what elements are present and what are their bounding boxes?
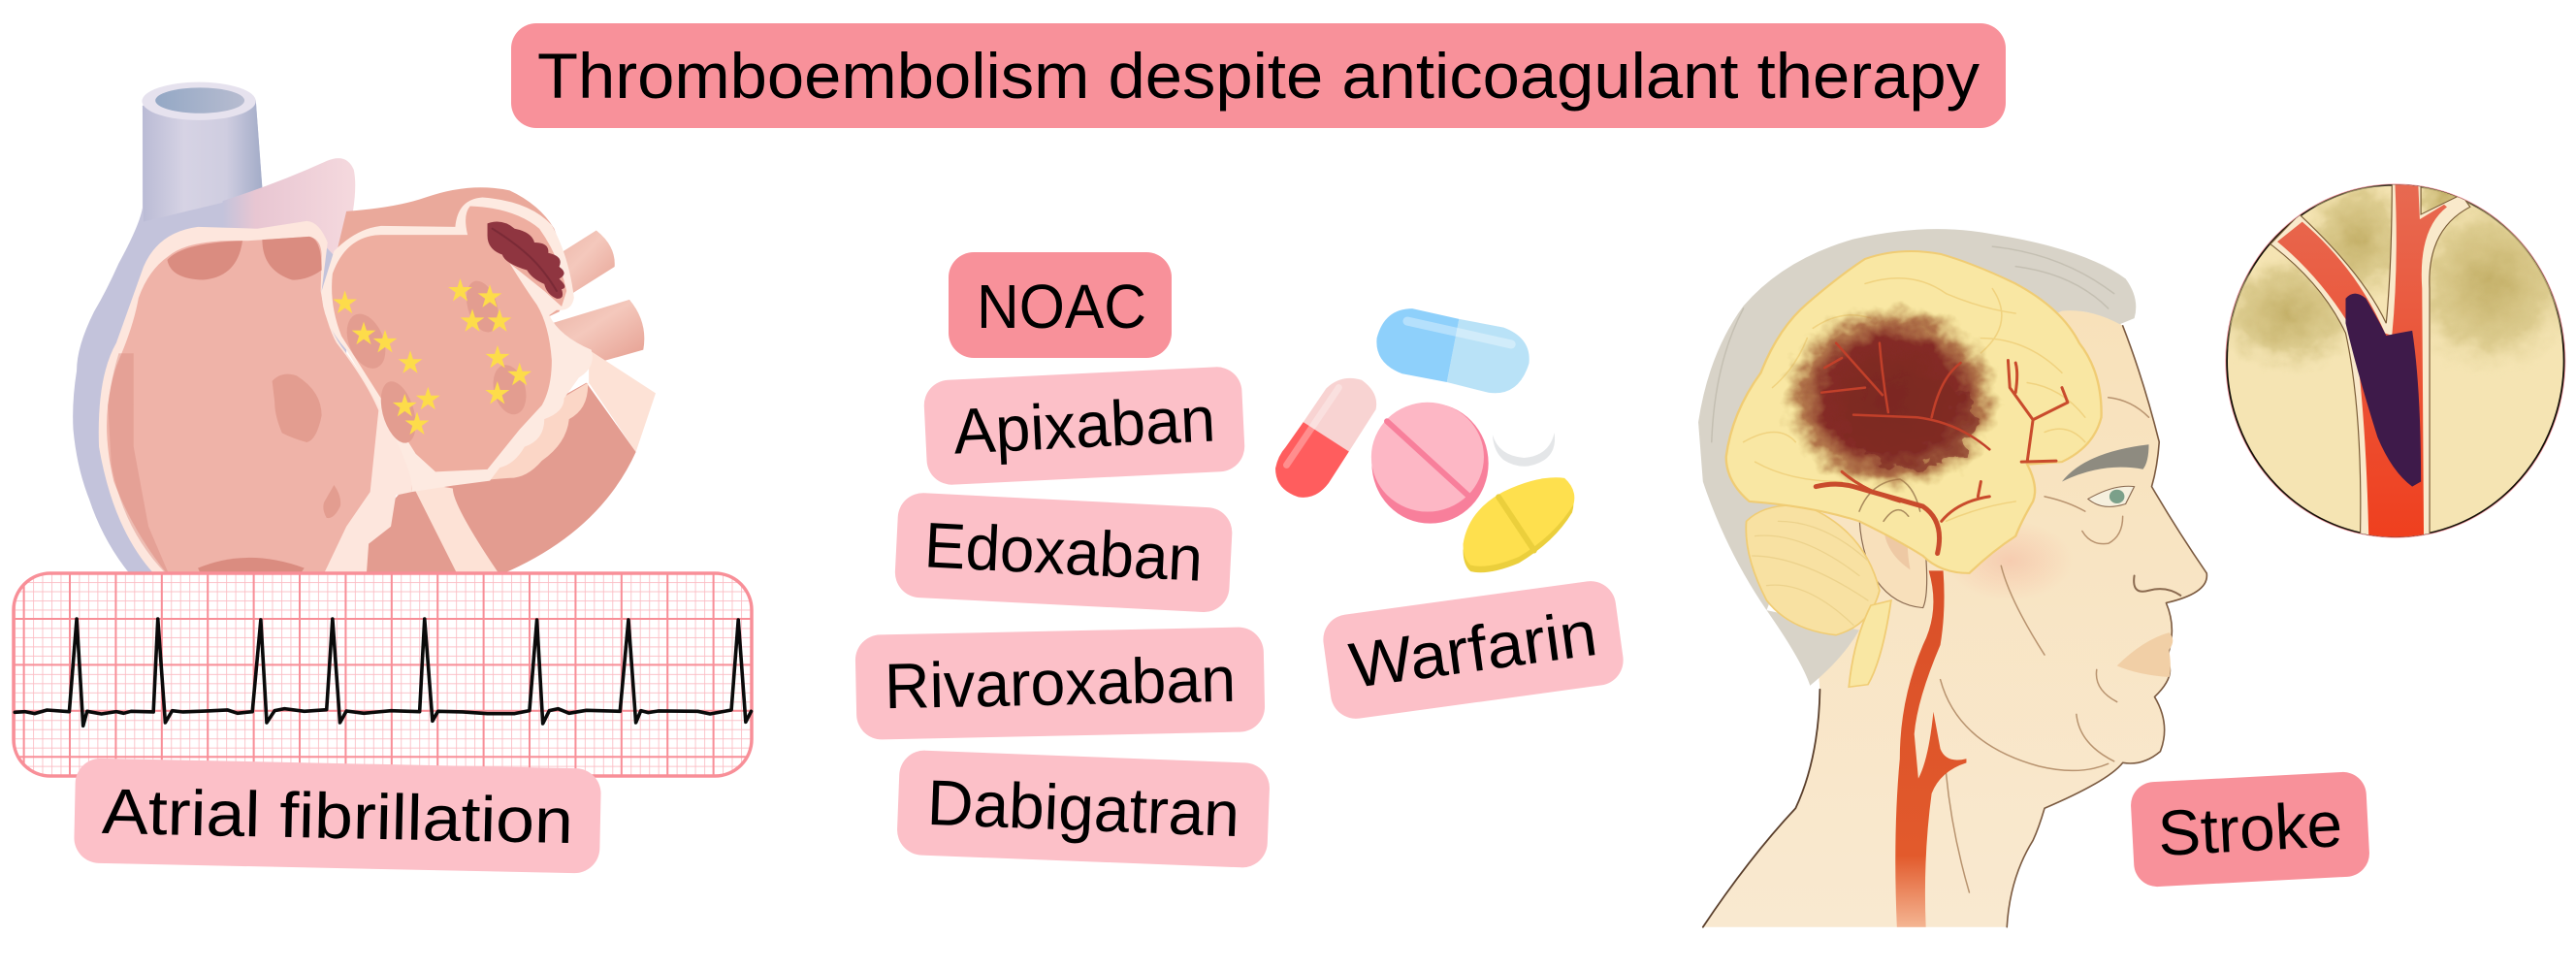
drug: Rivaroxaban: Rivaroxaban xyxy=(884,643,1237,722)
atrium wall xyxy=(322,198,593,492)
white tablet xyxy=(1493,433,1555,467)
infarct region xyxy=(1781,304,2001,492)
ventricle wall xyxy=(99,221,411,578)
title: Thromboembolism despite anticoagulant therapy xyxy=(537,40,1980,112)
heart illustration xyxy=(73,82,656,578)
cheek blush xyxy=(1947,521,2074,600)
face profile outline xyxy=(2007,326,2206,927)
brain xyxy=(1726,251,2102,573)
blue capsule xyxy=(1376,308,1530,393)
facial wrinkles xyxy=(1941,398,2149,892)
ear xyxy=(1859,479,1927,608)
neck back outline xyxy=(1703,690,1819,927)
eye xyxy=(2088,486,2135,506)
drug: Rivaroxaban xyxy=(854,627,1266,740)
papillary muscle shadows xyxy=(108,237,340,578)
inset: clot in vessel xyxy=(2225,183,2566,538)
drug: Warfarin xyxy=(1320,578,1626,722)
ECG trace xyxy=(15,619,751,726)
brain stem xyxy=(1849,600,1891,687)
scalloped fat under atrium xyxy=(488,383,588,480)
nose shadow xyxy=(2134,575,2180,596)
hair xyxy=(1698,229,2136,686)
brain folds xyxy=(1744,278,2085,521)
drug: Edoxaban: Edoxaban xyxy=(922,508,1205,595)
cerebral arteries xyxy=(1816,343,2068,554)
septum band xyxy=(415,487,498,572)
pink tablet xyxy=(1371,403,1489,524)
drug: Edoxaban xyxy=(894,492,1234,613)
label: Atrial fibrillation xyxy=(74,758,601,874)
ECG strip xyxy=(14,573,752,776)
pills illustration xyxy=(1275,308,1574,572)
pulmonary vein lower xyxy=(554,300,644,361)
eyebrow xyxy=(2062,444,2149,482)
pulmonary vein upper xyxy=(564,231,615,293)
cerebellum folds xyxy=(1753,521,1868,625)
stars: fibrillation foci xyxy=(333,278,531,435)
ear outline over brain xyxy=(1859,479,1920,521)
hair strands xyxy=(1712,246,2114,442)
tissue discoloration xyxy=(2227,184,2563,369)
title xyxy=(511,23,2006,128)
red capsule xyxy=(1275,378,1376,498)
heading: NOAC: NOAC xyxy=(977,272,1146,341)
atrium chamber xyxy=(332,206,566,471)
label: Stroke xyxy=(2130,771,2370,888)
drug: Apixaban xyxy=(923,366,1245,486)
label: Stroke: Stroke xyxy=(2156,788,2344,869)
common carotid artery xyxy=(1895,570,1966,927)
vein opening xyxy=(142,82,256,120)
lips xyxy=(2117,632,2173,677)
vena cava and right side of heart xyxy=(73,101,346,578)
skin: face and neck xyxy=(1703,308,2206,927)
head with stroke illustration xyxy=(1698,229,2206,927)
vessel wall xyxy=(2270,179,2470,541)
ventricle chamber xyxy=(107,237,378,578)
pale band xyxy=(589,350,656,452)
drug: Warfarin: Warfarin xyxy=(1345,597,1601,701)
clot xyxy=(2345,294,2421,487)
vein tube xyxy=(143,101,262,222)
drug: Apixaban: Apixaban xyxy=(951,382,1217,468)
yellow tablet xyxy=(1464,477,1574,572)
thrombus xyxy=(488,222,564,299)
left atrial roof xyxy=(337,187,574,319)
atrial ridge shadows xyxy=(340,279,531,445)
back ventricle xyxy=(367,382,636,572)
cerebellum xyxy=(1746,505,1880,635)
pulmonary patch xyxy=(223,158,355,263)
vessel lumen xyxy=(2277,179,2447,541)
drug: Dabigatran xyxy=(896,750,1271,868)
heading: NOAC xyxy=(949,252,1172,358)
label: Atrial fibrillation: Atrial fibrillation xyxy=(101,775,574,857)
drug: Dabigatran: Dabigatran xyxy=(926,766,1240,850)
